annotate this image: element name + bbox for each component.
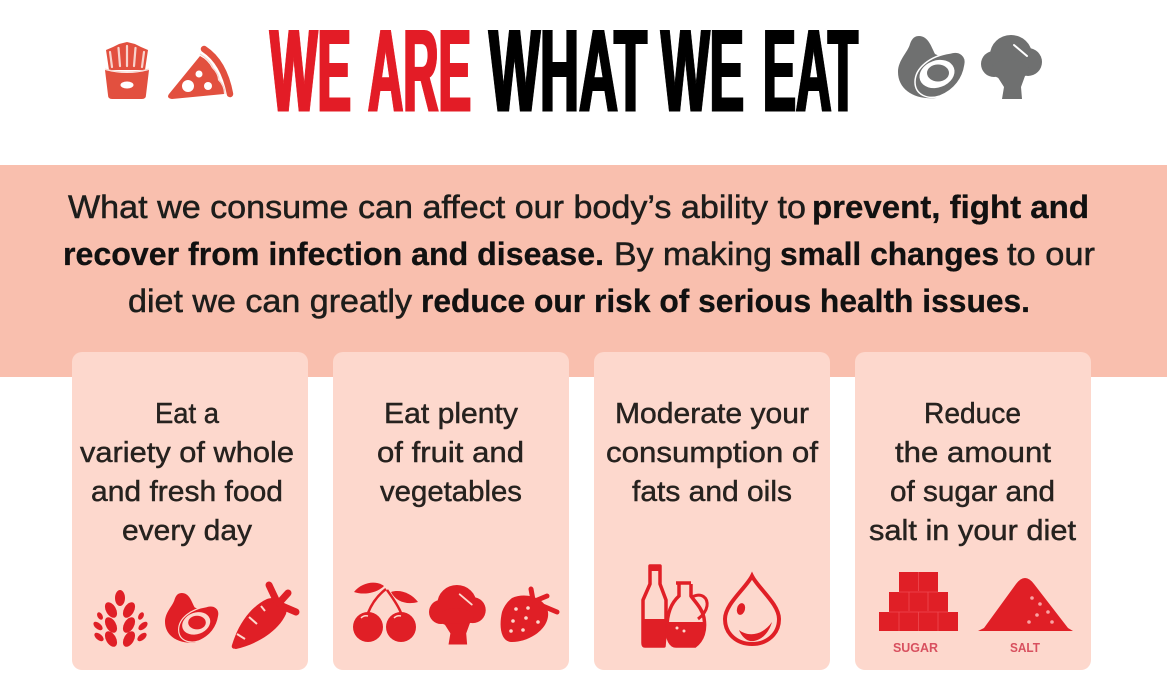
title: WE	[270, 5, 351, 136]
card text: Eat a	[155, 398, 220, 430]
intro text: small changes	[780, 236, 999, 272]
label: salt: SALT	[1010, 640, 1040, 655]
text: EAT	[763, 5, 858, 136]
intro text	[63, 189, 1095, 319]
icon: wheat	[92, 590, 149, 649]
icon: salt pile	[978, 578, 1073, 631]
card text: of fruit and	[377, 437, 524, 469]
card text: salt in your diet	[869, 515, 1076, 547]
card text: Eat plenty	[384, 398, 519, 430]
card text: every day	[122, 515, 253, 547]
intro text: reduce our risk of serious health issues.	[421, 283, 1030, 319]
icon: sugar cubes	[879, 572, 958, 631]
intro text: prevent, fight and	[812, 189, 1089, 225]
intro text: diet we can greatly	[128, 283, 412, 319]
card text	[869, 398, 1076, 547]
icon: avocado	[165, 593, 219, 643]
intro text: recover from infection and disease.	[63, 236, 604, 272]
icon: oil jug	[667, 583, 707, 647]
card text: Moderate your	[615, 398, 809, 430]
card text: Reduce	[924, 398, 1021, 430]
card text	[377, 398, 524, 508]
panel: fruit and vegetables	[333, 352, 569, 670]
label: sugar: SUGAR	[893, 640, 939, 655]
card text	[80, 398, 294, 547]
icon: oil bottle	[642, 565, 666, 647]
title	[270, 5, 858, 136]
title: ARE	[368, 5, 471, 136]
card text	[606, 398, 819, 508]
icon: strawberry	[501, 589, 557, 642]
card text: of sugar and	[890, 476, 1055, 508]
title: WHAT	[489, 5, 647, 136]
icon: grey avocado	[898, 36, 965, 98]
icon: carrot	[232, 585, 296, 649]
intro text: By making	[614, 236, 772, 272]
icon: oil drop	[725, 576, 779, 644]
icon: cherries	[353, 583, 418, 642]
panel: fats and oils	[594, 352, 830, 670]
icon: grey broccoli	[981, 35, 1042, 99]
card text: fats and oils	[632, 476, 792, 508]
panel: sugar and salt	[855, 352, 1091, 670]
card text: and fresh food	[91, 476, 283, 508]
intro text: to our	[1007, 236, 1095, 272]
intro text: What we consume can affect our body’s ability to	[68, 189, 806, 225]
card text: variety of whole	[80, 437, 294, 469]
title: WE	[661, 5, 744, 136]
panel: intro band	[0, 165, 1167, 377]
panel: whole and fresh food	[72, 352, 308, 670]
card text: the amount	[895, 437, 1051, 469]
icon: broccoli	[429, 585, 486, 645]
card text: vegetables	[380, 476, 522, 508]
icon: fries	[105, 42, 149, 99]
icon: pizza slice	[168, 49, 230, 99]
card text: consumption of	[606, 437, 819, 469]
